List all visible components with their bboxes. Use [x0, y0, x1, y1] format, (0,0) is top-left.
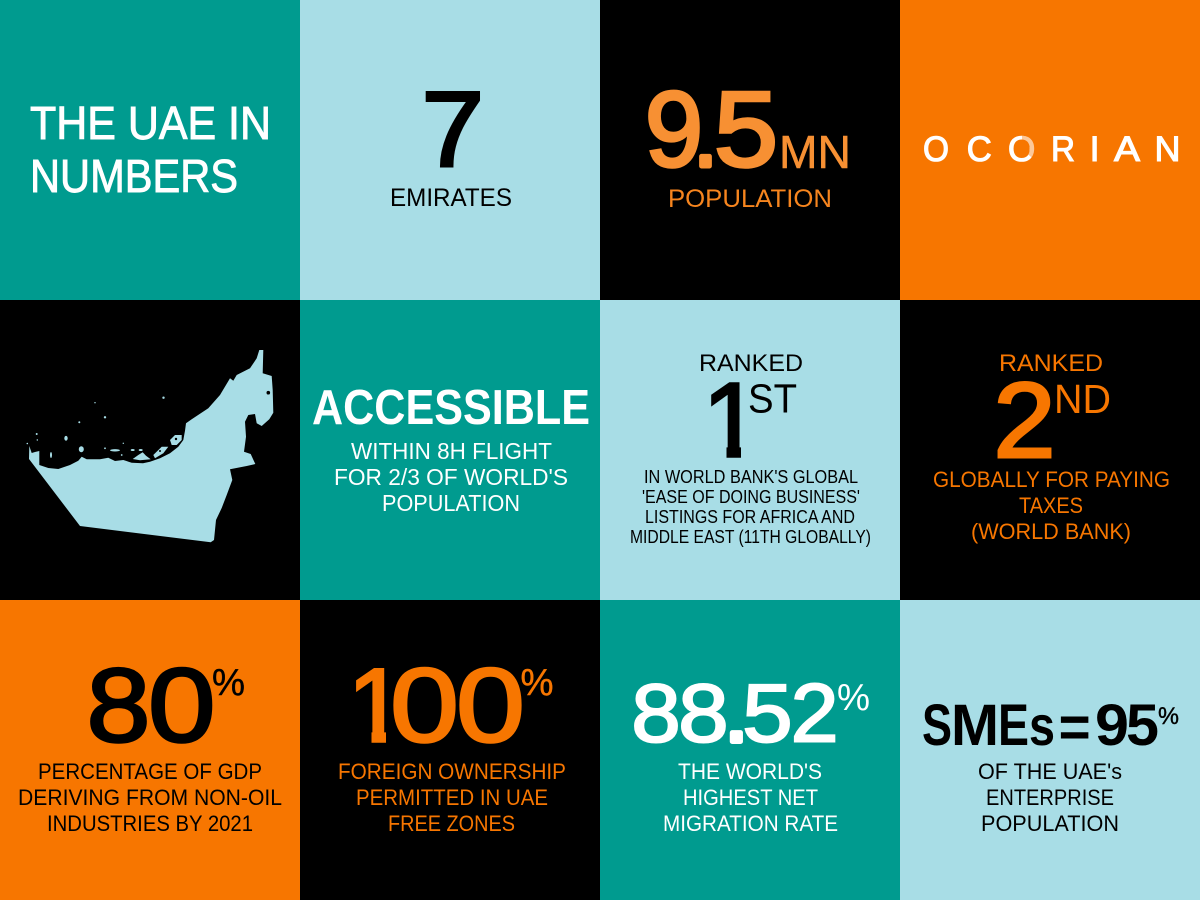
- text: flight reach: WITHIN 8H FLIGHT: [351, 438, 552, 464]
- number: 1st: 1: [702, 362, 761, 480]
- number: 80 percent: 8: [86, 648, 150, 764]
- logo: Ocorian: O: [1008, 130, 1035, 169]
- label: ranked: RANKED: [699, 350, 803, 377]
- logo: Ocorian: C: [967, 130, 992, 169]
- heading: THE UAE IN: [30, 97, 271, 149]
- number: 80 percent: [86, 648, 245, 764]
- number: 80 percent: %: [212, 662, 245, 704]
- text: GDP: PERCENTAGE OF GDP: [38, 759, 262, 784]
- panel: emirates: [300, 0, 600, 300]
- number: 1st: ST: [748, 376, 797, 422]
- panel: title: [0, 0, 300, 300]
- number: 100 percent: 0: [456, 648, 525, 764]
- number: 88.52 percent: 8: [678, 666, 729, 760]
- number: 88.52 percent: 8: [631, 666, 681, 760]
- number: 9.5 million: .: [694, 86, 717, 186]
- text: flight reach: [334, 438, 568, 516]
- logo: Ocorian: I: [1090, 130, 1100, 169]
- text: ease of doing business: IN WORLD BANK'S GLOBAL: [644, 467, 858, 487]
- panel: accessible: [300, 300, 600, 600]
- number: 100 percent: [356, 666, 552, 744]
- text: paying taxes: (WORLD BANK): [971, 519, 1131, 544]
- number: 80 percent: 0: [148, 648, 216, 764]
- text: foreign ownership: PERMITTED IN UAE: [356, 785, 548, 810]
- number: SMEs 95 percent: E: [998, 693, 1029, 758]
- number: 9.5 million: 5: [714, 69, 778, 189]
- panel: foreign ownership: [340, 666, 565, 831]
- number: 9.5 million: MN: [779, 126, 851, 178]
- text: ease of doing business: [630, 467, 871, 547]
- text: foreign ownership: FREE ZONES: [388, 811, 515, 836]
- number: 100 percent: %: [520, 662, 554, 704]
- number: SMEs 95 percent: 5: [1126, 693, 1159, 758]
- panel: SMEs: [900, 600, 1200, 900]
- number: 9.5 million: 9: [645, 69, 703, 189]
- text: foreign ownership: [338, 759, 566, 836]
- logo: Ocorian: A: [1114, 130, 1141, 169]
- number: 9.5 million: [645, 69, 851, 189]
- number: 88.52 percent: [631, 666, 870, 760]
- text: GDP: INDUSTRIES BY 2021: [47, 811, 253, 836]
- panel: map: [0, 300, 300, 600]
- panel: GDP: [0, 600, 300, 900]
- number: 2nd: [994, 360, 1111, 480]
- logo: Ocorian: O: [923, 130, 949, 169]
- text: foreign ownership: FOREIGN OWNERSHIP: [338, 759, 566, 784]
- number: SMEs 95 percent: M: [951, 693, 999, 758]
- number: 7: 7: [422, 69, 484, 189]
- caption: emirates: EMIRATES: [390, 184, 512, 212]
- number: 88.52 percent: 5: [742, 666, 793, 760]
- number: 88.52 percent: %: [837, 677, 870, 719]
- number: 100 percent: 0: [390, 648, 459, 764]
- panel: logo: [900, 0, 1200, 300]
- panel: population: [600, 0, 900, 300]
- number: 2nd: ND: [1054, 376, 1111, 422]
- text: flight reach: FOR 2/3 OF WORLD'S: [334, 464, 568, 490]
- number: SMEs 95 percent: =: [1059, 695, 1091, 760]
- number: SMEs 95 percent: [922, 693, 1179, 760]
- text: paying taxes: TAXES: [1019, 493, 1083, 518]
- text: ease of doing business: MIDDLE EAST (11TH GLOBALLY): [630, 527, 871, 547]
- number: SMEs 95 percent: S: [922, 693, 952, 758]
- text: ease of doing business: 'EASE OF DOING BUSINESS': [642, 487, 860, 507]
- text: enterprise population: POPULATION: [981, 811, 1119, 836]
- caption: population: POPULATION: [668, 185, 832, 213]
- number: 88.52 percent: .: [725, 666, 748, 760]
- panel: ranked 1st: [600, 300, 900, 600]
- logo: Ocorian: R: [1051, 130, 1075, 169]
- text: paying taxes: GLOBALLY FOR PAYING: [933, 467, 1170, 492]
- panel: ranked 2nd: [900, 300, 1200, 600]
- logo: Ocorian: [923, 130, 1180, 169]
- text: GDP: DERIVING FROM NON-OIL: [18, 785, 282, 810]
- number: SMEs 95 percent: s: [1029, 694, 1055, 757]
- number: 2nd: 2: [994, 360, 1056, 480]
- text: enterprise population: OF THE UAE's: [978, 759, 1122, 784]
- heading: NUMBERS: [30, 150, 238, 202]
- heading: accessible: ACCESSIBLE: [312, 381, 590, 435]
- logo: Ocorian: N: [1154, 130, 1180, 169]
- number: SMEs 95 percent: 9: [1095, 693, 1129, 758]
- text: migration: HIGHEST NET: [683, 785, 818, 810]
- heading: [30, 97, 271, 202]
- label: ranked: RANKED: [999, 350, 1103, 377]
- number: SMEs 95 percent: %: [1158, 703, 1179, 730]
- text: migration: THE WORLD'S: [678, 759, 822, 784]
- text: enterprise population: ENTERPRISE: [986, 785, 1114, 810]
- text: GDP: [18, 759, 282, 836]
- panel: migration: [600, 600, 900, 900]
- text: migration: MIGRATION RATE: [663, 811, 838, 836]
- text: flight reach: POPULATION: [382, 490, 520, 516]
- text: paying taxes: [933, 467, 1170, 544]
- text: enterprise population: [978, 759, 1122, 836]
- text: migration: [663, 759, 838, 836]
- number: 88.52 percent: 2: [791, 666, 839, 760]
- map: UAE: [26, 350, 273, 542]
- number: 1st: [711, 382, 796, 458]
- text: ease of doing business: LISTINGS FOR AFRICA AND: [645, 507, 855, 527]
- number: 100 percent: 1: [347, 648, 406, 764]
